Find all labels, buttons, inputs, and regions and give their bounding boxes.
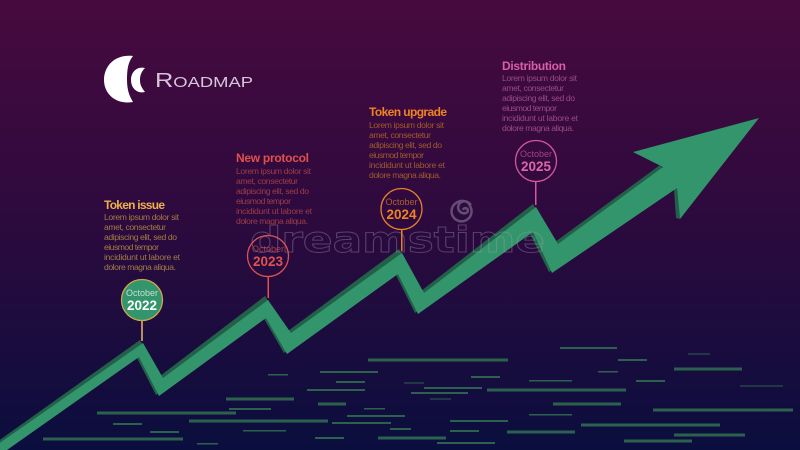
body text: dolore magna aliqua. xyxy=(104,262,176,272)
date badge: October xyxy=(252,244,284,254)
connector xyxy=(535,181,536,205)
connector xyxy=(401,230,402,251)
watermark xyxy=(250,201,545,261)
icon: crescent logo xyxy=(104,56,145,102)
date badge xyxy=(381,188,422,230)
body text xyxy=(104,212,181,272)
date badge xyxy=(122,280,162,320)
body text xyxy=(502,73,579,133)
body text: Lorem ipsum dolor sit xyxy=(236,166,312,176)
body text: dolore magna aliqua. xyxy=(502,123,574,133)
decorative horizontal streaks xyxy=(43,347,793,444)
body text: adipiscing elit, sed do xyxy=(369,140,442,150)
arrow face xyxy=(0,118,759,450)
connector xyxy=(268,277,269,298)
body text: Lorem ipsum dolor sit xyxy=(502,73,578,83)
growth arrow xyxy=(0,118,759,450)
body text: Lorem ipsum dolor sit xyxy=(104,212,180,222)
body text: eiusmod tempor xyxy=(104,242,159,252)
title: R OADMAP xyxy=(155,70,253,92)
date badge: 2024 xyxy=(386,207,417,222)
date badge xyxy=(248,236,288,276)
body text: adipiscing elit, sed do xyxy=(104,232,177,242)
date badge: October xyxy=(520,149,552,159)
watermark word: dreamstime xyxy=(250,220,545,261)
heading: Distribution xyxy=(502,59,566,73)
body text: eiusmod tempor xyxy=(502,103,557,113)
arrow shadow xyxy=(0,165,680,450)
heading: New protocol xyxy=(236,151,309,165)
heading: Token issue xyxy=(104,198,165,212)
connector xyxy=(141,321,143,341)
body text: incididunt ut labore et xyxy=(104,252,181,262)
body text: eiusmod tempor xyxy=(369,150,424,160)
milestone: Token issue xyxy=(104,198,181,341)
date badge: October xyxy=(385,197,418,207)
body text xyxy=(236,166,313,226)
watermark spiral xyxy=(452,201,472,221)
date badge: October xyxy=(126,288,158,298)
body text: dolore magna aliqua. xyxy=(236,216,308,226)
body text: incididunt ut labore et xyxy=(502,113,579,123)
body text: amet, consectetur xyxy=(502,83,564,93)
milestone: New protocol xyxy=(236,151,313,298)
body text: amet, consectetur xyxy=(369,130,431,140)
date badge: 2022 xyxy=(127,298,157,313)
milestone: Token upgrade xyxy=(369,105,447,251)
logo and Roadmap title xyxy=(104,56,253,102)
date badge: 2023 xyxy=(253,254,284,269)
milestone: Distribution xyxy=(502,59,579,205)
date badge xyxy=(516,140,556,182)
body text: adipiscing elit, sed do xyxy=(502,93,575,103)
body text: Lorem ipsum dolor sit xyxy=(369,120,445,130)
body text: dolore magna aliqua. xyxy=(369,170,441,180)
body text: eiusmod tempor xyxy=(236,196,291,206)
body text: adipiscing elit, sed do xyxy=(236,186,309,196)
body text xyxy=(369,120,446,180)
body text: incididunt ut labore et xyxy=(236,206,313,216)
heading: Token upgrade xyxy=(369,105,447,119)
date badge: 2025 xyxy=(521,159,552,174)
body text: incididunt ut labore et xyxy=(369,160,446,170)
body text: amet, consectetur xyxy=(104,222,166,232)
body text: amet, consectetur xyxy=(236,176,298,186)
